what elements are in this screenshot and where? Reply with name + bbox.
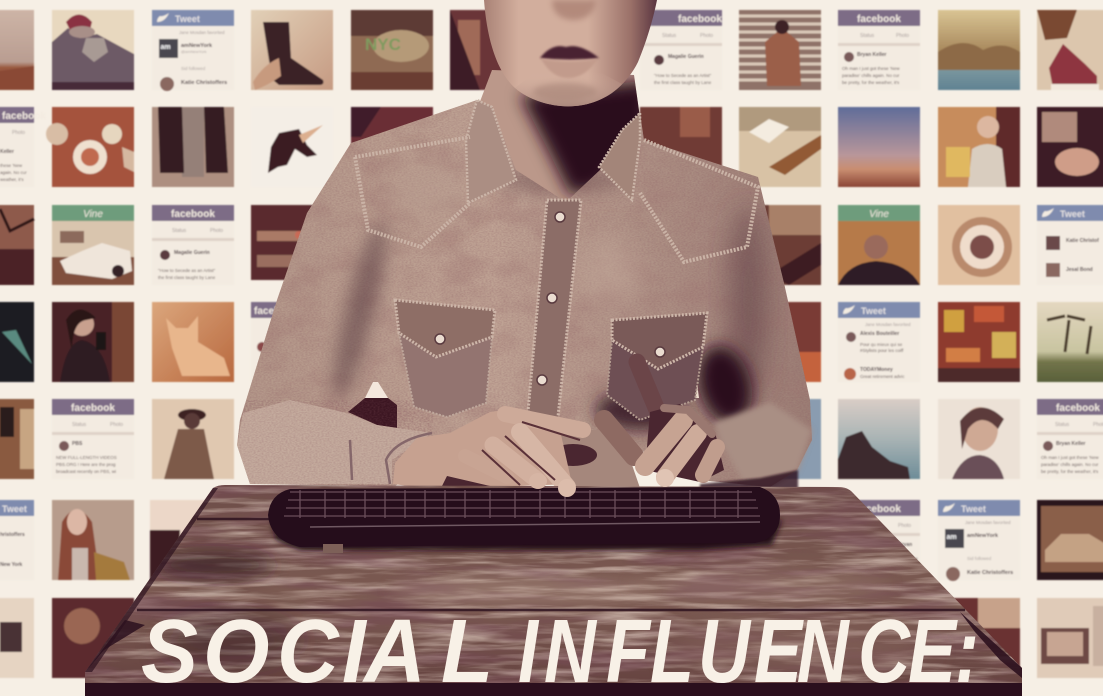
tile: facebook card lower: got these 'New [888, 556, 918, 561]
shirt body and sleeves [237, 100, 812, 487]
tile: woman portrait [938, 399, 1020, 479]
tile: old brown building [0, 399, 34, 479]
left collar [466, 100, 516, 203]
stubble [533, 83, 597, 101]
button placket [525, 200, 581, 445]
tile: rocks by water [838, 399, 920, 479]
keyboard body [268, 487, 780, 547]
tile: colorful market [938, 302, 1020, 382]
tile: tweet card: Sid followed [967, 556, 992, 561]
tile: facebook card: "How to Secede as an Artist" [654, 73, 712, 78]
tile: tweet card: Alexis Bouteiller [860, 331, 899, 337]
tile: dark brown cafe [739, 205, 821, 285]
tile: vintage car dark [1037, 500, 1103, 580]
tile: facebook card: Status [662, 33, 677, 39]
tile: facebook card: Oh man I just got these 'New [1041, 455, 1099, 460]
chin shading [515, 72, 622, 106]
tile: orange red abstract [739, 302, 821, 382]
keyboard front lip [310, 522, 760, 527]
tile: facebook card [640, 10, 722, 90]
tile: blue sliver [739, 399, 821, 479]
tile: facebook card: facebook [171, 209, 215, 220]
wooden table [85, 485, 1023, 696]
tile: facebook card: be pretty, for the weather, it's [1041, 469, 1099, 474]
shirt buttons [537, 212, 565, 385]
title [141, 601, 979, 696]
face [484, 0, 657, 106]
tile: facebook card: PBS [72, 441, 83, 447]
tile: tweet card [938, 500, 1020, 581]
right chest pocket [607, 313, 707, 420]
tile: facebook card: Status [1055, 422, 1070, 428]
tile: tweet card: Sid followed [181, 66, 206, 71]
cuff seam [350, 433, 432, 484]
keys [284, 490, 760, 518]
table front edge [85, 683, 1022, 696]
keyboard shadow [272, 520, 782, 550]
tile: facebook card: Photo [210, 228, 223, 234]
tile: facebook card: facebook [1056, 403, 1100, 414]
tile: facebook card [251, 302, 333, 382]
tile: facebook card: facebook [71, 403, 115, 414]
keyboard foot [323, 544, 343, 553]
tile: facebook card cropped [0, 107, 46, 187]
tile: facebook card: facebook [857, 14, 901, 25]
tile: facebook card: Magalie Guerin [668, 54, 704, 60]
tile: neon sign [351, 10, 433, 90]
tile: facebook card: Status [72, 422, 87, 428]
tile: dark teal night [0, 302, 34, 382]
right collar [599, 113, 640, 200]
right forearm sleeve [713, 402, 812, 487]
tile: facebook card: Status [860, 33, 875, 39]
tile: tweet card: Jane Mosdan favorited [865, 322, 911, 327]
tile: facebook card [1037, 399, 1103, 479]
tile: facebook card: Oh man I just got these 'New [842, 66, 900, 71]
table left edge [85, 488, 218, 672]
shadow under right sleeve [700, 470, 798, 490]
tile: tablet on beige desk [739, 107, 821, 187]
tile: tweet card: @amNewYork [181, 49, 206, 54]
shirt visible between the hands [470, 430, 640, 488]
tile: leather boot [251, 10, 333, 90]
tile: facebook card cropped: facebook [2, 111, 46, 122]
tile: tweet card: Katie Christoffers [181, 80, 227, 86]
wood grain [85, 485, 1023, 696]
tile: desert landscape [0, 10, 34, 90]
tile: traffic at night [251, 205, 333, 280]
tile: purple sky over desert [838, 107, 920, 187]
neck [480, 70, 640, 200]
neck shadow under jaw [520, 80, 650, 195]
tile: tweet card: Tweet [861, 306, 886, 316]
plank seams [137, 519, 965, 610]
shirt folds and shadows [325, 160, 766, 430]
tile: facebook card cropped: weather, it's [0, 177, 24, 182]
tile: tweet card: Katie Christof [1066, 238, 1099, 244]
tile: man in coat against stripes [739, 10, 821, 90]
left forearm sleeve [237, 400, 432, 484]
tile: tweet card: TODAYMoney [860, 367, 893, 373]
tile: tweet card: Tweet [1060, 209, 1085, 219]
tile: tweet card cropped: hristoffers [0, 532, 25, 538]
table top [85, 485, 1022, 696]
upper lip [540, 46, 599, 60]
tile: facebook card: PBS.ORG ! Here are the prog [56, 462, 116, 467]
tile: tweet card: Jane Mosdan favorited [179, 30, 225, 35]
fingertips over keyboard [529, 469, 674, 497]
left hand [393, 408, 583, 490]
tile: red haired woman [52, 500, 134, 580]
tile: vine vintage car [52, 205, 134, 285]
man in denim shirt [237, 0, 813, 490]
tile: facebook card: Photo [700, 33, 713, 39]
tile: dark street [450, 10, 532, 90]
background gap under right arm [688, 381, 699, 398]
tile: facebook card lower: facebook [857, 504, 901, 515]
tile: facebook card: "How to Secede as an Artist" [158, 268, 216, 273]
tile: tweet card cropped: Tweet [2, 504, 27, 514]
worn patches [155, 551, 930, 674]
tile: camera lens [938, 205, 1020, 285]
tile: facebook card lower [838, 500, 920, 580]
tile: dark red right [938, 598, 1020, 678]
tile: tweet card: am [160, 44, 171, 51]
tile: facebook card: Photo [110, 422, 123, 428]
lower right corner wedge [960, 612, 1022, 678]
tile: light device [0, 598, 34, 678]
tile: tweet card: amNewYork [967, 533, 999, 539]
computer keyboard [268, 487, 782, 553]
dark gap under left arm [348, 398, 397, 428]
left chest pocket [395, 300, 495, 417]
tile: tweet card [838, 302, 920, 382]
tile: woman with phone [52, 302, 134, 382]
tile: hands and mugs dark [1037, 107, 1103, 187]
tile: coastal hills landscape [938, 10, 1020, 90]
tile: tweet card: #Stylists pour les coiff [860, 348, 904, 353]
tile: facebook card lower: Status [860, 523, 875, 529]
tile: facebook card [152, 205, 234, 285]
tile: tweet card: Jesal Bond [1066, 267, 1093, 273]
tile: dusky cityscape [150, 500, 232, 580]
forearm texture [238, 400, 433, 490]
tile: vine portrait [838, 205, 920, 285]
tile: tweet card: Great retirement advic [860, 374, 905, 379]
tile: facebook card: broadcast recently on PBS, wi [56, 469, 116, 474]
tile: facebook card: facebook [678, 14, 722, 25]
tile: unicorn silhouette [251, 107, 333, 187]
tile: red sneakers [1037, 10, 1103, 90]
tile: facebook card: Status [172, 228, 187, 234]
background showing under left arm [365, 382, 388, 398]
tile: orange dog [152, 302, 234, 382]
tile: black jacket [152, 107, 234, 187]
tile: desktop computer [1037, 598, 1103, 678]
tile: facebook card: paradise' chills again. No cur [1041, 462, 1099, 467]
tile: woman with hat [152, 399, 234, 479]
tile: denim sweater with red cap [52, 10, 134, 90]
tile: facebook card [838, 10, 920, 90]
tile: facebook card: NEW FULL-LENGTH VIDEOS [56, 455, 117, 460]
tile: neon sign: NYC [365, 35, 401, 54]
tile: dark faces [52, 598, 134, 678]
yokes with stitching [355, 137, 758, 262]
tile: tweet card: Jane Mosdan favorited [965, 520, 1011, 525]
tile: facebook card: Bryan Keller [857, 52, 887, 58]
tile: dark red interior right [640, 107, 722, 187]
tile: facebook card cropped: again. No cur [0, 170, 27, 175]
lower left corner wedge [87, 620, 145, 670]
tile: tweet card [1037, 205, 1103, 285]
tile: palm trees [1037, 302, 1103, 382]
tile: facebook card cropped: Keller [0, 149, 14, 155]
tile: tweet card: Tweet [175, 14, 200, 24]
tile: facebook card: Bryan Keller [1056, 441, 1086, 447]
tile: tweet card: amNewYork [181, 43, 213, 49]
tile: tweet card: Pour qu mieux qui se [860, 342, 903, 347]
tile: facebook card: the first class taught by Lane [654, 80, 712, 85]
tile: facebook card cropped: Photo [12, 130, 25, 136]
tile: facebook card: the first class taught by Lane [158, 275, 216, 280]
tile: man holding heart card [938, 107, 1020, 187]
tile: facebook card [52, 399, 134, 479]
tile: tweet card cropped: New York [0, 562, 23, 568]
tile: dark red interior [351, 107, 433, 187]
tile: facebook card: Photo [896, 33, 909, 39]
tile: facebook card: Magalie Guerin [174, 250, 210, 256]
tile: facebook card: paradise' chills again. No cur [842, 73, 900, 78]
tile: vine portrait: Vine [869, 209, 889, 220]
tile: facebook card lower: Photo [898, 523, 911, 529]
tile: tweet card cropped [0, 500, 34, 580]
tile: facebook card: facebook [254, 306, 298, 317]
lower lip [541, 59, 598, 78]
nose [552, 0, 596, 20]
tucked thumb shadow [549, 444, 597, 466]
denim mottling [238, 100, 813, 490]
tile: plates on wooden table [46, 107, 134, 187]
right hand with raised finger [604, 362, 724, 482]
tile: tweet card [152, 10, 234, 91]
tile: tweet card: Katie Christoffers [967, 570, 1013, 576]
tile: facebook card cropped: these 'New [0, 163, 23, 168]
tile: tweet card: am [946, 534, 957, 541]
tile: vine vintage car: Vine [83, 209, 103, 220]
tile: bridge at dusk [0, 205, 34, 285]
tile: facebook card: be pretty, for the weather, it's [842, 80, 900, 85]
tile: tweet card: Tweet [961, 504, 986, 514]
tile: facebook card lower: Bryan [898, 542, 912, 548]
